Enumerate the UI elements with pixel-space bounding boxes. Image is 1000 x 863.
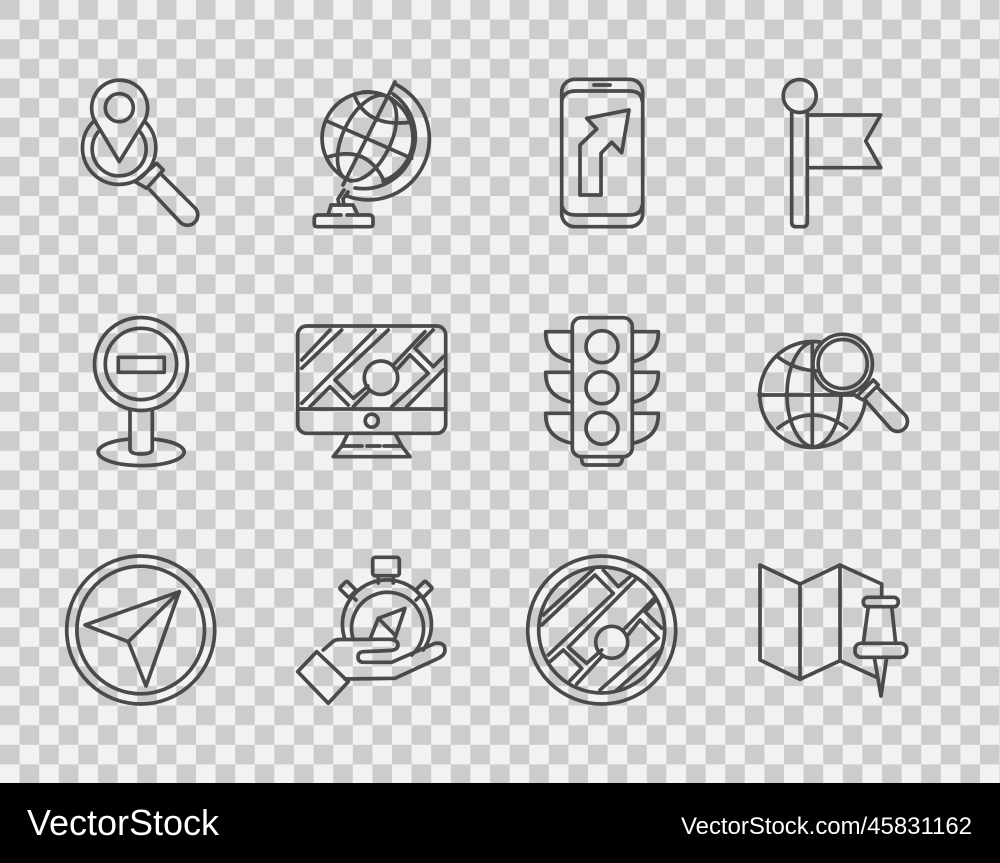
- icon: round city map: [528, 556, 676, 704]
- footer brand text: VectorStock: [27, 802, 220, 843]
- icon: traffic light: [546, 318, 658, 465]
- icon: no entry road sign: [94, 318, 188, 466]
- icon: desk globe: [314, 82, 429, 227]
- icon: computer monitor with city map: [298, 326, 446, 457]
- icon: location pin under magnifying glass: [82, 80, 198, 225]
- icon: globe with magnifying glass: [759, 334, 907, 447]
- footer image id text: VectorStock.com/45831162: [681, 813, 972, 840]
- footer bar: [0, 783, 1000, 863]
- icon: smartphone with turn arrow: [562, 79, 643, 227]
- icon: flag on pole: [783, 80, 881, 227]
- icon: folded map with push pin: [760, 565, 907, 696]
- icon: stopwatch compass on open hand: [298, 557, 445, 703]
- monitor map roads: [302, 330, 443, 407]
- round map roads: [542, 569, 665, 692]
- icon: compass navigation arrow: [67, 556, 215, 704]
